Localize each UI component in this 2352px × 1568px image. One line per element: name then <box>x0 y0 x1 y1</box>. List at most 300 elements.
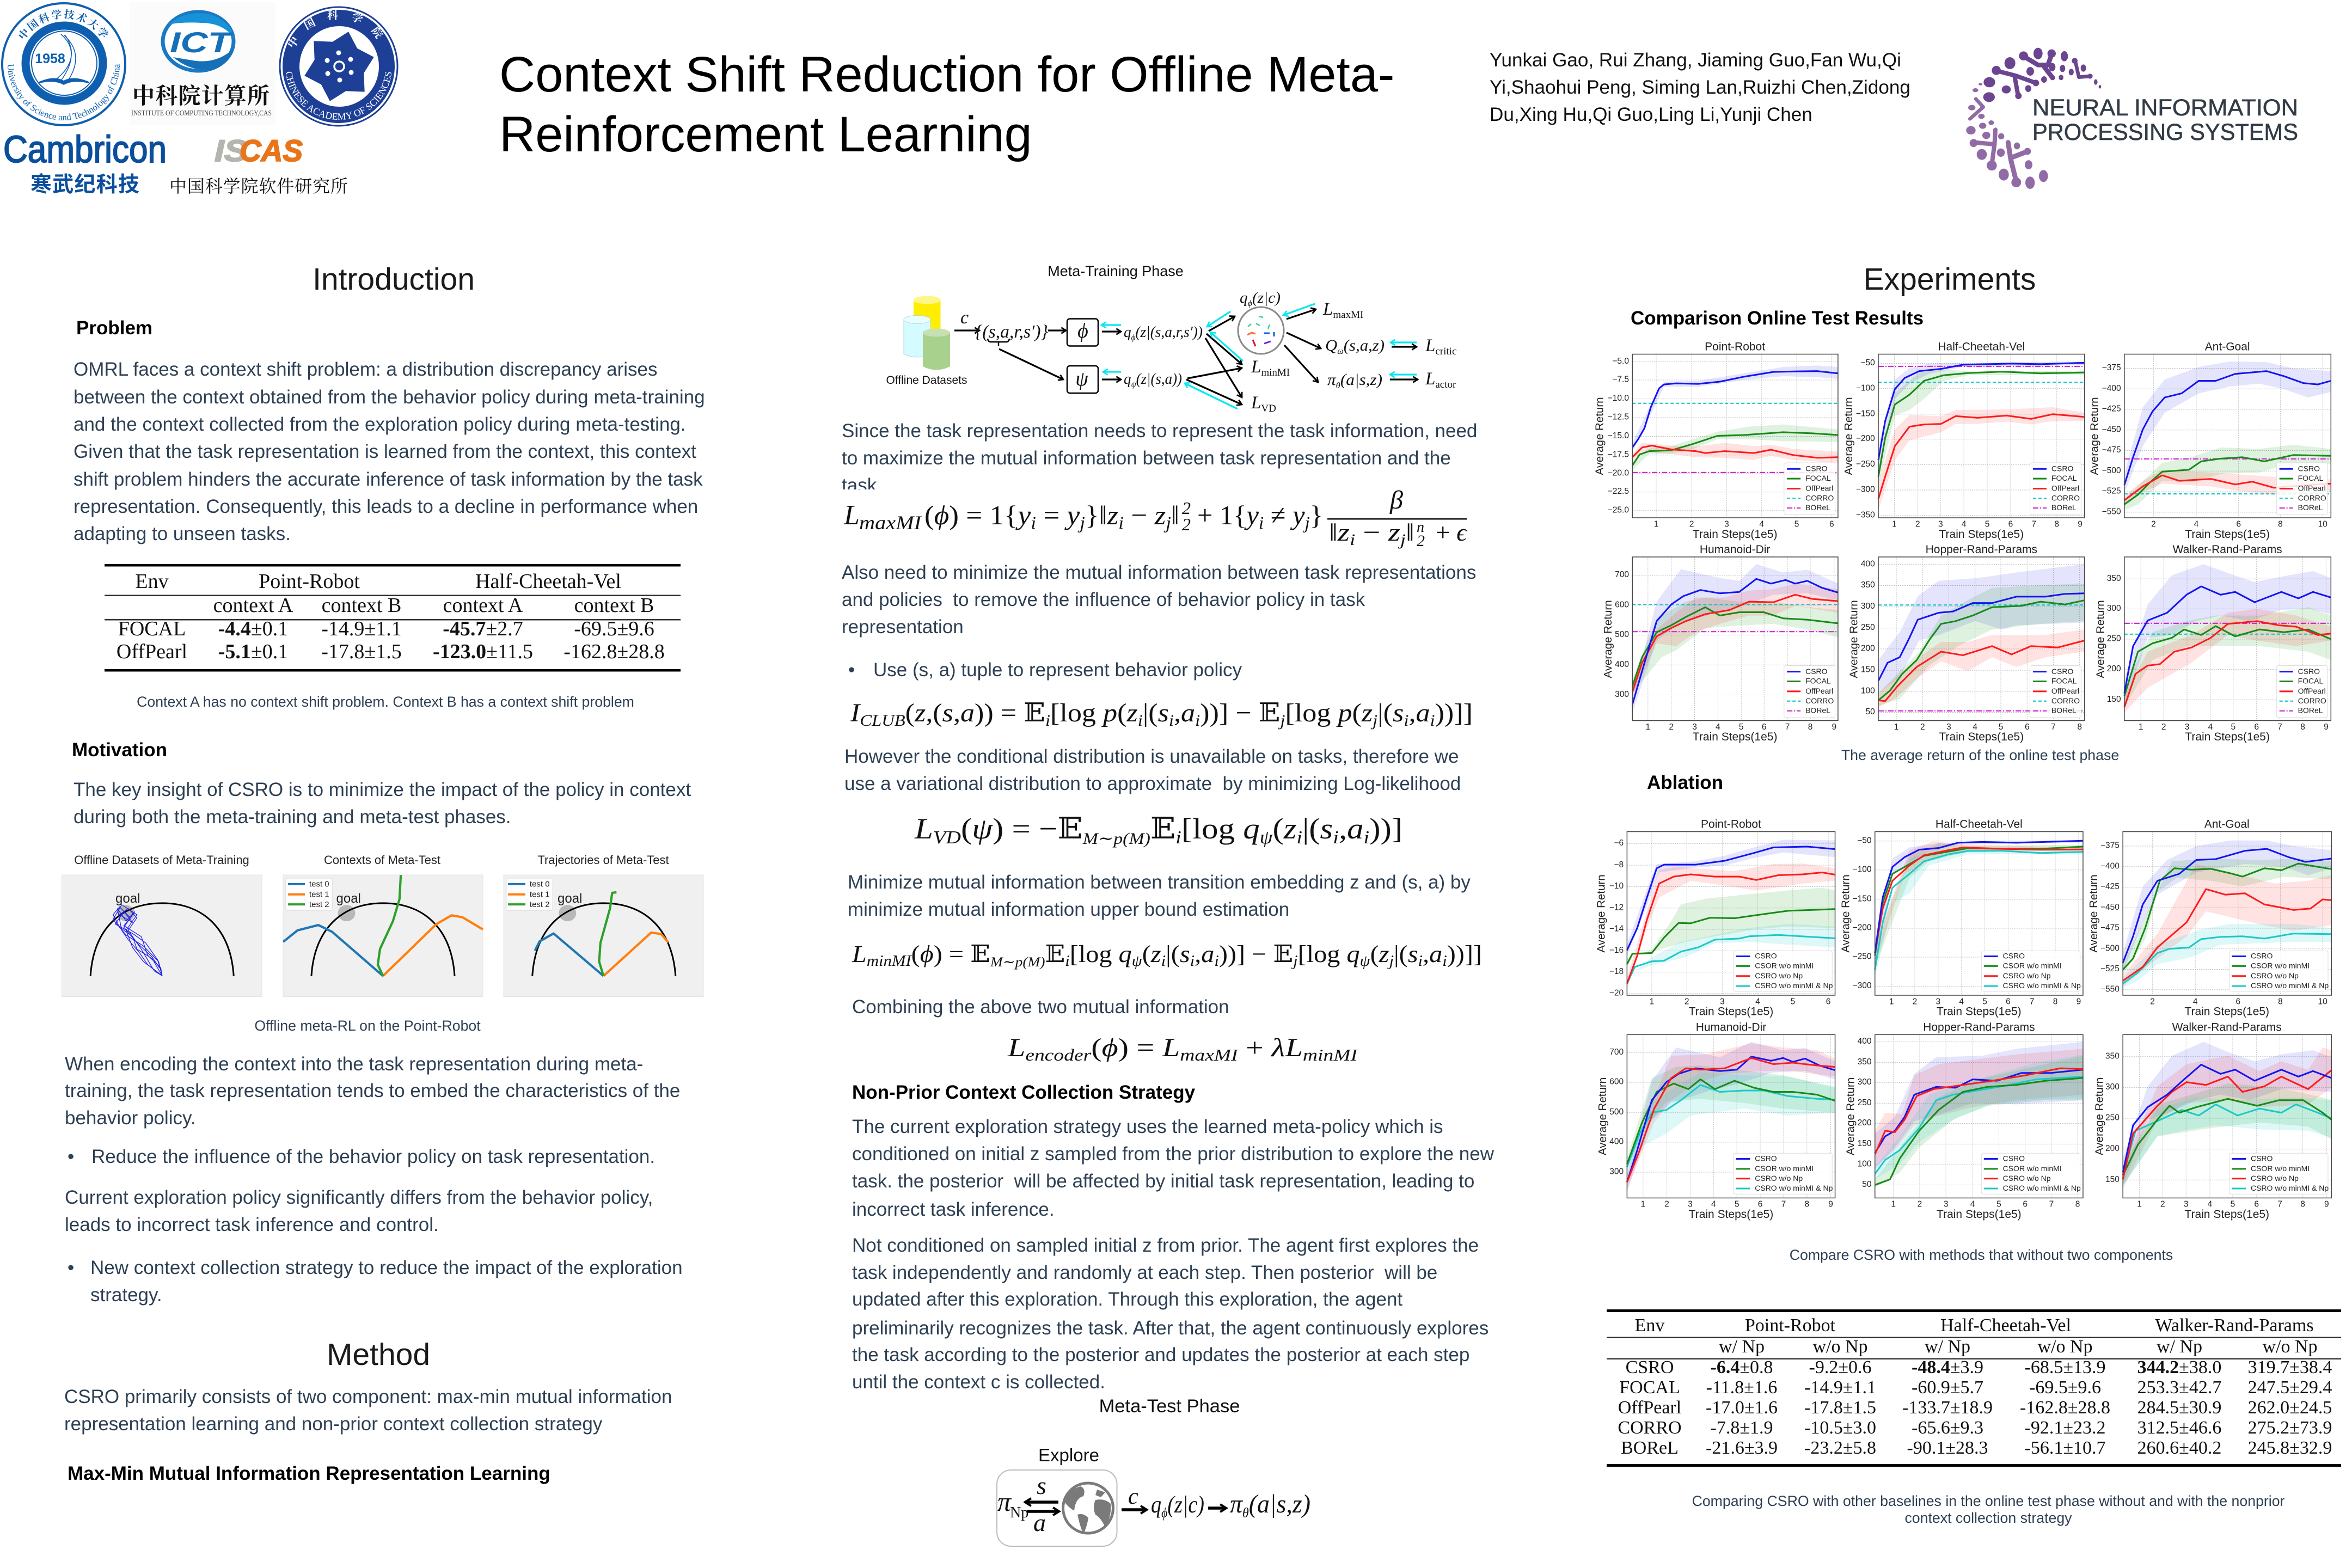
figure caption: Offline meta-RL on the Point-Robot <box>254 1018 481 1034</box>
chart: Humanoid-Dir ablation: Humanoid-Dir <box>1696 1021 1766 1033</box>
chart: Point-Robot comparison: Train Steps(1e5) <box>1693 528 1777 541</box>
text block: minimize mutual information: Use (s, a) tuple to represent behavior policy <box>873 659 1242 681</box>
chart: Half-Cheetah-Vel ablation <box>1839 818 2083 1018</box>
chart group: ablation <box>1595 818 2331 1221</box>
chart: Point-Robot comparison: 5 <box>1794 519 1799 529</box>
equation: L maxMI: j <box>1398 531 1406 549</box>
chart: Walker-Rand-Params comparison: OffPearl <box>2298 687 2326 695</box>
logo: University of Science and Technology of China: 1958 <box>35 51 65 66</box>
logo: Chinese Academy of Sciences: 中国科学院 <box>287 10 383 47</box>
equation: L maxMI: − <box>1124 500 1155 530</box>
table: baseline comparison with and without non-prior: FOCAL <box>1619 1377 1680 1398</box>
chart: Humanoid-Dir comparison: BOReL <box>1805 706 1830 715</box>
chart: Half-Cheetah-Vel comparison: 2 <box>1915 519 1920 529</box>
icon: phi encoder box: ϕ <box>1077 320 1088 342</box>
chart: Half-Cheetah-Vel ablation: −250 <box>1853 952 1872 961</box>
equation: L minMI: q <box>1119 941 1131 967</box>
chart: Humanoid-Dir ablation: 300 <box>1609 1167 1624 1177</box>
chart: Half-Cheetah-Vel ablation: CSRO w/o Np <box>2003 971 2051 980</box>
text block: context encoding: training, the task representation tends to embed the characteristics of the <box>65 1080 680 1101</box>
chart: Walker-Rand-Params ablation: 5 <box>2231 1200 2235 1209</box>
chart: Point-Robot comparison: −20.0 <box>1608 468 1629 477</box>
equation: L maxMI: β <box>1389 486 1403 514</box>
equation: L maxMI: i <box>1259 513 1264 533</box>
table: baseline comparison with and without non-prior: w/ Np <box>1719 1337 1765 1357</box>
chart group: comparison online test results <box>1594 340 2331 743</box>
chart: Humanoid-Dir ablation <box>1596 1021 1835 1221</box>
logo: Chinese Academy of Sciences: CHINESE ACADEMY OF SCIENCES <box>286 72 391 120</box>
chart: Walker-Rand-Params ablation: CSRO w/o minMI & Np <box>2251 1184 2329 1192</box>
diagram: meta-training phase: minMI <box>1261 367 1290 378</box>
chart: Point-Robot comparison: −15.0 <box>1608 431 1629 440</box>
equation: I CLUB: s <box>1158 699 1168 727</box>
chart: Humanoid-Dir ablation: 7 <box>1781 1200 1786 1209</box>
chart: Point-Robot ablation: −18 <box>1609 967 1624 976</box>
chart: Point-Robot ablation <box>1595 818 1835 1018</box>
text block: maximize mutual information <box>842 424 1477 489</box>
chart: Hopper-Rand-Params comparison: 150 <box>1861 665 1875 675</box>
equation: I CLUB: |( <box>1143 699 1158 727</box>
chart: Ant-Goal ablation: CSRO <box>2251 952 2273 960</box>
figure: trajectories of meta-test: goal <box>558 891 582 906</box>
logo: Cambricon: 寒武纪科技 <box>30 173 139 197</box>
equation: L minMI: z <box>1379 941 1388 967</box>
equation: L minMI: i <box>1065 953 1070 970</box>
chart: Hopper-Rand-Params comparison: 200 <box>1861 644 1875 653</box>
chart: Half-Cheetah-Vel comparison: 7 <box>2031 519 2036 529</box>
equation: L encoder: encoder <box>1025 1045 1092 1064</box>
table: context shift results: -17.8±1.5 <box>321 640 402 663</box>
text block: problem description: Given that the task representation is learned from the context, this context <box>74 441 696 462</box>
chart: Hopper-Rand-Params comparison: 100 <box>1861 686 1875 695</box>
chart: Half-Cheetah-Vel comparison: −50 <box>1860 358 1875 367</box>
chart: Humanoid-Dir comparison: 3 <box>1692 722 1697 732</box>
diagram: meta-training phase: q <box>1124 370 1131 388</box>
text block: non-prior strategy: preliminarily recognizes the task. After that, the agent continuously explores <box>852 1318 1489 1339</box>
chart: Humanoid-Dir comparison <box>1602 543 1838 743</box>
chart: Point-Robot ablation: −20 <box>1609 988 1624 997</box>
equation: L maxMI: ‖z <box>1329 518 1347 546</box>
chart: Humanoid-Dir comparison: 400 <box>1615 660 1629 669</box>
chart: Hopper-Rand-Params comparison: 7 <box>2051 722 2056 732</box>
chart: Walker-Rand-Params comparison: 200 <box>2107 664 2121 673</box>
chart: Ant-Goal comparison: −450 <box>2102 425 2121 434</box>
table: baseline comparison with and without non-prior: -14.9±1.1 <box>1804 1377 1876 1398</box>
chart: Walker-Rand-Params ablation: 9 <box>2324 1200 2329 1209</box>
chart: Ant-Goal ablation: CSRO w/o Np <box>2251 971 2299 980</box>
chart: Hopper-Rand-Params ablation: 1 <box>1891 1200 1896 1209</box>
chart: Hopper-Rand-Params comparison <box>1848 543 2085 743</box>
chart: Walker-Rand-Params comparison: 250 <box>2107 634 2121 644</box>
diagram: meta-training phase: θ <box>1336 381 1340 390</box>
chart: Ant-Goal ablation: −425 <box>2100 882 2120 891</box>
equation: L maxMI: + ϵ <box>1436 518 1468 546</box>
table: context shift results: -69.5±9.6 <box>574 617 654 640</box>
chart: Half-Cheetah-Vel comparison: −250 <box>1856 460 1875 469</box>
chart: Walker-Rand-Params comparison: CSRO <box>2298 667 2320 676</box>
diagram: meta-training phase: (z|(s,a,r,s′)) <box>1135 323 1203 341</box>
figure: offline datasets of meta-training <box>62 853 262 996</box>
chart: Hopper-Rand-Params comparison: 2 <box>1920 722 1925 732</box>
diagram: meta-training phase: L <box>1251 357 1261 377</box>
table: baseline comparison with and without non-prior: -17.8±1.5 <box>1804 1398 1876 1418</box>
chart: Point-Robot ablation: 1 <box>1650 997 1654 1006</box>
chart: Hopper-Rand-Params ablation: CSRO <box>2003 1154 2025 1163</box>
logo: NeurIPS: PROCESSING SYSTEMS <box>2032 119 2298 145</box>
chart: Humanoid-Dir comparison: OffPearl <box>1805 687 1833 695</box>
chart: Walker-Rand-Params comparison: 4 <box>2208 722 2213 732</box>
logo: University of Science and Technology of China: University of Science and Technology of China <box>8 64 120 121</box>
chart: Ant-Goal comparison: BOReL <box>2298 503 2323 512</box>
text block: problem description: OMRL faces a context shift problem: a distribution discrepancy arises <box>74 359 658 380</box>
table: baseline comparison with and without non-prior: -9.2±0.6 <box>1809 1357 1871 1377</box>
equation: L maxMI: (ϕ) = 1{y <box>924 500 1030 530</box>
chart: Half-Cheetah-Vel ablation: 2 <box>1913 997 1917 1006</box>
chart: Ant-Goal ablation: 8 <box>2278 997 2283 1006</box>
chart: Ant-Goal comparison: −550 <box>2102 507 2121 516</box>
authors: Yi,Shaohui Peng, Siming Lan,Ruizhi Chen,Zidong <box>1490 77 1910 98</box>
chart: Hopper-Rand-Params comparison: 8 <box>2077 722 2082 732</box>
diagram: meta-test phase: a <box>1033 1509 1046 1536</box>
chart: Half-Cheetah-Vel ablation: Half-Cheetah-Vel <box>1935 818 2023 830</box>
text block: context encoding <box>65 1054 683 1306</box>
figure: trajectories of meta-test <box>504 853 703 996</box>
chart: Hopper-Rand-Params comparison: CSRO <box>2051 667 2073 676</box>
chart: Point-Robot comparison: Point-Robot <box>1705 340 1765 353</box>
chart: Walker-Rand-Params ablation: 7 <box>2277 1200 2282 1209</box>
text block: variational distribution: use a variational distribution to approximate by minimizing Log-likelihood <box>844 773 1461 794</box>
figure: offline datasets of meta-training: Offline Datasets of Meta-Training <box>74 853 249 867</box>
chart: Point-Robot comparison: 2 <box>1689 519 1694 529</box>
chart: Walker-Rand-Params comparison: BOReL <box>2298 706 2323 715</box>
table: context shift results: OffPearl <box>117 640 187 663</box>
diagram: meta-training phase: ϕ <box>1248 299 1252 308</box>
table: context shift results: Point-Robot <box>259 570 360 593</box>
table: context shift results: FOCAL <box>118 617 186 640</box>
chart: Hopper-Rand-Params comparison: 300 <box>1861 602 1875 611</box>
chart: Hopper-Rand-Params ablation: Train Steps(1e5) <box>1937 1208 2022 1221</box>
equation: L minMI: ϕ) = 𝔼 <box>920 941 985 967</box>
subheading: Max-Min Mutual Information Representation Learning: Max-Min Mutual Information Representation Learning <box>68 1463 550 1484</box>
chart: Humanoid-Dir comparison: 300 <box>1615 690 1629 699</box>
equation: L VD: ψ <box>1260 828 1273 848</box>
equation: L maxMI: z <box>1155 500 1165 530</box>
equation: L maxMI: i <box>1118 513 1124 533</box>
table: baseline comparison with and without non-prior: w/ Np <box>2157 1337 2202 1357</box>
icon: phi encoder box <box>1067 319 1098 346</box>
chart: Ant-Goal comparison: Train Steps(1e5) <box>2185 528 2270 541</box>
chart: Point-Robot ablation: CSRO <box>1755 952 1777 960</box>
equation: I CLUB: ))]] <box>1435 699 1473 727</box>
chart: Half-Cheetah-Vel comparison: Average Return <box>1842 397 1855 475</box>
chart: Point-Robot ablation: −6 <box>1614 838 1624 848</box>
subheading: Motivation: Motivation <box>72 739 167 761</box>
equation: I CLUB: p(z <box>1338 699 1372 727</box>
chart: Ant-Goal comparison: 4 <box>2194 519 2199 529</box>
text block: problem description: shift problem hinders the accurate inference of task information by the task <box>74 469 703 490</box>
chart: Hopper-Rand-Params ablation: 150 <box>1858 1139 1872 1148</box>
logo: Institute of Computing Technology: 中科院计算所 <box>132 78 270 110</box>
equation: L maxMI: − <box>1355 518 1388 546</box>
figure: trajectories of meta-test: test 2 <box>530 900 550 909</box>
chart: Humanoid-Dir ablation: 9 <box>1828 1200 1833 1209</box>
chart: Humanoid-Dir comparison: 8 <box>1808 722 1812 732</box>
chart: Hopper-Rand-Params ablation: 4 <box>1970 1200 1975 1209</box>
diagram: meta-training phase: L <box>1425 336 1435 356</box>
chart: Hopper-Rand-Params comparison: Hopper-Rand-Params <box>1926 543 2037 556</box>
equation: L minMI: ( <box>1142 941 1151 967</box>
equation: L encoder: λL <box>1271 1033 1297 1062</box>
chart: Hopper-Rand-Params ablation: 5 <box>1996 1200 2001 1209</box>
chart: Walker-Rand-Params ablation <box>2093 1021 2331 1221</box>
equation: L maxMI: i <box>1350 531 1355 549</box>
table: baseline comparison with and without non-prior <box>1607 1309 2341 1467</box>
logo: University of Science and Technology of China: 中国科学技术大学 <box>19 9 109 39</box>
diagram: meta-training phase: critic <box>1435 346 1456 357</box>
chart: Walker-Rand-Params comparison: FOCAL <box>2298 677 2323 685</box>
table: context shift results: Half-Cheetah-Vel <box>475 570 621 593</box>
chart: Walker-Rand-Params ablation: 4 <box>2208 1200 2213 1209</box>
equation: I CLUB: i <box>1195 712 1200 730</box>
chart: Half-Cheetah-Vel ablation: 9 <box>2077 997 2081 1006</box>
chart: Half-Cheetah-Vel ablation: 7 <box>2030 997 2034 1006</box>
chart: Hopper-Rand-Params comparison: 6 <box>2025 722 2030 732</box>
diagram: meta-training phase: ϕ <box>1131 333 1135 342</box>
heading: Method: Method <box>327 1337 430 1372</box>
chart: Half-Cheetah-Vel comparison: −100 <box>1856 383 1875 393</box>
chart: Hopper-Rand-Params comparison: CORRO <box>2051 696 2080 705</box>
table: baseline comparison with and without non-prior: -92.1±23.2 <box>2025 1418 2105 1438</box>
table: baseline comparison with and without non-prior: Half-Cheetah-Vel <box>1940 1315 2071 1336</box>
table: baseline comparison with and without non-prior: -10.5±3.0 <box>1804 1418 1876 1438</box>
chart: Point-Robot ablation: Point-Robot <box>1701 818 1761 830</box>
table: baseline comparison with and without non-prior: -162.8±28.8 <box>2020 1398 2110 1418</box>
logo: NeurIPS: NEURAL INFORMATION <box>2032 95 2298 121</box>
figure: trajectories of meta-test: test 1 <box>530 890 550 899</box>
figure: contexts of meta-test: test 1 <box>309 890 329 899</box>
text block: current exploration strategy: task. the posterior will be affected by initial task representation, leading to <box>852 1171 1474 1192</box>
heading: Introduction: Introduction <box>313 262 475 297</box>
equation: L minMI: L <box>852 941 865 967</box>
diagram: meta-training phase: q <box>1124 323 1131 341</box>
diagram: meta-test phase: π <box>1230 1490 1243 1518</box>
chart: Humanoid-Dir comparison: 6 <box>1762 722 1767 732</box>
chart: Hopper-Rand-Params comparison: FOCAL <box>2051 677 2077 685</box>
text block: variational distribution <box>844 746 1461 794</box>
table: baseline comparison with and without non-prior: 247.5±29.4 <box>2248 1377 2332 1398</box>
chart: Half-Cheetah-Vel comparison: 3 <box>1938 519 1943 529</box>
logo: Institute of Computing Technology <box>130 2 275 125</box>
text block: non-prior strategy: updated after this exploration. Through this exploration, the agent <box>852 1289 1402 1310</box>
chart: Hopper-Rand-Params ablation: 100 <box>1858 1160 1872 1169</box>
diagram: meta-training phase: c <box>960 308 969 328</box>
table: baseline comparison with and without non-prior: 245.8±32.9 <box>2248 1438 2332 1458</box>
title <box>499 47 1394 162</box>
chart: Hopper-Rand-Params comparison: 1 <box>1894 722 1898 732</box>
chart: Point-Robot comparison: 1 <box>1654 519 1658 529</box>
caption: baseline comparison: context collection strategy <box>1904 1510 2072 1526</box>
chart: Walker-Rand-Params ablation: 150 <box>2105 1175 2120 1184</box>
diagram: meta-test phase: c <box>1128 1484 1138 1509</box>
subheading: Comparison Online Test Results: Comparison Online Test Results <box>1631 308 1924 329</box>
equation: I CLUB: |( <box>1377 699 1393 727</box>
equation: L VD: ψ) = −𝔼 <box>972 812 1073 845</box>
chart: Walker-Rand-Params comparison: 7 <box>2277 722 2282 732</box>
chart: Walker-Rand-Params ablation: 200 <box>2105 1144 2120 1153</box>
chart: Point-Robot comparison: FOCAL <box>1805 474 1831 482</box>
chart: Walker-Rand-Params comparison: 350 <box>2107 574 2121 583</box>
chart: Ant-Goal ablation: −550 <box>2100 984 2120 994</box>
logo: NeurIPS <box>1966 48 2298 189</box>
text block: minimize mutual information: representation <box>842 616 964 638</box>
diagram: meta-training phase: Meta-Training Phase <box>1048 263 1184 279</box>
table: baseline comparison with and without non-prior: 284.5±30.9 <box>2137 1398 2221 1418</box>
figure: trajectories of meta-test: Trajectories of Meta-Test <box>537 853 669 867</box>
chart: Humanoid-Dir ablation: 3 <box>1688 1200 1693 1209</box>
diagram: meta-training phase: maxMI <box>1333 309 1363 321</box>
chart: Walker-Rand-Params ablation: CSRO w/o Np <box>2251 1174 2299 1183</box>
equation: L maxMI: ≠ <box>1264 500 1293 530</box>
chart: Ant-Goal ablation: 10 <box>2318 997 2328 1006</box>
figure: contexts of meta-test <box>283 853 483 996</box>
diagram: meta-training phase: {(s,a,r,s′)} <box>975 322 1048 342</box>
text block: problem description: adapting to unseen tasks. <box>74 523 291 544</box>
equation: L minMI: j <box>1387 953 1394 970</box>
equation: L VD: i <box>1333 828 1339 848</box>
equation: I CLUB: ))] − 𝔼 <box>1200 699 1280 727</box>
chart: Hopper-Rand-Params ablation: 6 <box>2023 1200 2028 1209</box>
text block: problem description: and the context collected from the exploration policy during meta-testing. <box>74 414 686 435</box>
chart: Humanoid-Dir comparison: 2 <box>1669 722 1674 732</box>
logo: ISCAS: IS <box>215 133 247 168</box>
equation: L minMI: i <box>1190 953 1195 970</box>
table: context shift results: context A <box>213 594 293 617</box>
equation: L VD: [log <box>1181 812 1243 845</box>
chart: Half-Cheetah-Vel comparison: Train Steps(1e5) <box>1939 528 2024 541</box>
chart: Ant-Goal comparison: 6 <box>2236 519 2241 529</box>
subheading: Problem: Problem <box>76 317 152 339</box>
caption: baseline comparison: Comparing CSRO with other baselines in the online test phase without and with the nonprior <box>1692 1493 2285 1509</box>
chart: Half-Cheetah-Vel comparison: 6 <box>2008 519 2013 529</box>
equation: L minMI: s <box>1408 941 1417 967</box>
chart: Half-Cheetah-Vel ablation: −150 <box>1853 895 1872 904</box>
equation: I CLUB: [log <box>1050 699 1103 727</box>
table: baseline comparison with and without non-prior: -65.6±9.3 <box>1912 1418 1983 1438</box>
logo: Cambricon <box>3 128 167 197</box>
chart: Ant-Goal ablation: −475 <box>2100 923 2120 933</box>
equation: L minMI: i <box>1442 953 1447 970</box>
table: baseline comparison with and without non-prior: OffPearl <box>1618 1398 1681 1418</box>
chart: Ant-Goal ablation: 2 <box>2150 997 2155 1006</box>
chart: Half-Cheetah-Vel ablation: 3 <box>1936 997 1940 1006</box>
text block: maximize mutual information: to maximize the mutual information between task representation and the <box>842 448 1451 469</box>
heading: Experiments: Experiments <box>1864 262 2036 297</box>
authors <box>1490 50 1910 125</box>
chart: Point-Robot ablation: 6 <box>1826 997 1830 1006</box>
chart: Ant-Goal comparison: Average Return <box>2088 397 2101 475</box>
diagram: meta-test phase: (a|s,z) <box>1249 1490 1310 1518</box>
chart: Walker-Rand-Params comparison: 8 <box>2300 722 2305 732</box>
chart: Hopper-Rand-Params ablation: 8 <box>2075 1200 2080 1209</box>
chart: Point-Robot ablation: 4 <box>1755 997 1760 1006</box>
table: baseline comparison with and without non-prior: -11.8±1.6 <box>1706 1377 1777 1398</box>
chart: Humanoid-Dir ablation: CSOR w/o minMI <box>1755 1164 1814 1173</box>
chart: Humanoid-Dir comparison: 500 <box>1615 630 1629 639</box>
table: baseline comparison with and without non-prior: 262.0±24.5 <box>2248 1398 2332 1418</box>
chart: Point-Robot ablation: CSRO w/o Np <box>1755 971 1803 980</box>
equation: L minMI: ( <box>911 941 920 967</box>
text block: problem description: representation. Consequently, this leads to a decline in performance when <box>74 496 698 517</box>
chart: Hopper-Rand-Params ablation: 3 <box>1944 1200 1948 1209</box>
table: baseline comparison with and without non-prior: -6.4±0.8 <box>1711 1357 1773 1377</box>
figure: contexts of meta-test: test 0 <box>309 879 329 889</box>
text block: non-prior strategy: Not conditioned on sampled initial z from prior. The agent first explores the <box>852 1235 1479 1256</box>
chart: Walker-Rand-Params ablation: 350 <box>2105 1051 2120 1061</box>
chart: Point-Robot comparison: 6 <box>1829 519 1834 529</box>
equation: L VD: ( <box>1272 812 1284 845</box>
chart: Humanoid-Dir comparison: CORRO <box>1805 696 1834 705</box>
chart: Ant-Goal ablation <box>2087 818 2331 1018</box>
text block: context encoding: behavior policy. <box>65 1107 196 1129</box>
chart: Hopper-Rand-Params ablation: CSOR w/o minMI <box>2003 1164 2062 1173</box>
chart: Point-Robot comparison: CSRO <box>1805 464 1828 473</box>
diagram: meta-test phase: Meta-Test Phase <box>1099 1396 1240 1417</box>
equation: L minMI: ))]] <box>1447 941 1482 967</box>
equation: L minMI: q <box>1346 941 1358 967</box>
chart: Hopper-Rand-Params comparison: OffPearl <box>2051 687 2079 695</box>
equation: L minMI: i <box>1161 953 1166 970</box>
chart: Walker-Rand-Params comparison: Average Return <box>2094 600 2106 678</box>
chart: Humanoid-Dir ablation: 500 <box>1609 1107 1624 1117</box>
equation: L minMI: ( <box>1370 941 1379 967</box>
chart: Walker-Rand-Params comparison: 9 <box>2324 722 2329 732</box>
chart: Point-Robot comparison: OffPearl <box>1805 484 1833 493</box>
chart: Humanoid-Dir ablation: Train Steps(1e5) <box>1689 1208 1773 1221</box>
chart: Point-Robot comparison: BOReL <box>1805 503 1830 512</box>
diagram: meta-test phase: π <box>997 1486 1012 1517</box>
chart: Point-Robot ablation: −12 <box>1609 903 1624 912</box>
chart: Walker-Rand-Params comparison: 300 <box>2107 604 2121 613</box>
equation: L minMI: ))] − 𝔼 <box>1219 941 1293 967</box>
chart: Ant-Goal comparison: 2 <box>2151 519 2156 529</box>
chart: Hopper-Rand-Params ablation: Average Return <box>1844 1077 1857 1155</box>
chart: Half-Cheetah-Vel comparison: −350 <box>1856 511 1875 520</box>
table: baseline comparison with and without non-prior: w/o Np <box>2037 1337 2093 1357</box>
chart: Walker-Rand-Params comparison: 3 <box>2185 722 2189 732</box>
chart: Walker-Rand-Params ablation: Average Return <box>2093 1077 2106 1155</box>
equation: L maxMI: maxMI <box>859 512 922 534</box>
title: Context Shift Reduction for Offline Meta- <box>499 47 1394 102</box>
text block: context encoding: • <box>68 1146 74 1167</box>
chart: Humanoid-Dir ablation: 1 <box>1641 1200 1645 1209</box>
text block: problem description: between the context obtained from the behavior policy during meta-training <box>74 387 705 408</box>
chart: Walker-Rand-Params comparison: 6 <box>2254 722 2259 732</box>
text block: minimize mutual information <box>842 562 1476 681</box>
table: baseline comparison with and without non-prior: -56.1±10.7 <box>2025 1438 2105 1458</box>
text block: context encoding: strategy. <box>90 1284 162 1306</box>
chart: Hopper-Rand-Params ablation: 2 <box>1918 1200 1922 1209</box>
chart: Point-Robot comparison: −7.5 <box>1612 375 1629 384</box>
chart: Point-Robot comparison: −10.0 <box>1608 394 1629 403</box>
equation: L VD: L <box>915 812 931 845</box>
equation: I CLUB: i <box>1138 712 1143 730</box>
table: baseline comparison with and without non-prior: 260.6±40.2 <box>2137 1438 2221 1458</box>
chart: Hopper-Rand-Params ablation: CSRO w/o minMI & Np <box>2003 1184 2081 1192</box>
chart: Humanoid-Dir comparison: 700 <box>1615 570 1629 579</box>
equation: L minMI: z <box>1151 941 1160 967</box>
equation: L maxMI: j <box>1302 513 1310 533</box>
equation: L maxMI: n <box>1417 519 1424 536</box>
